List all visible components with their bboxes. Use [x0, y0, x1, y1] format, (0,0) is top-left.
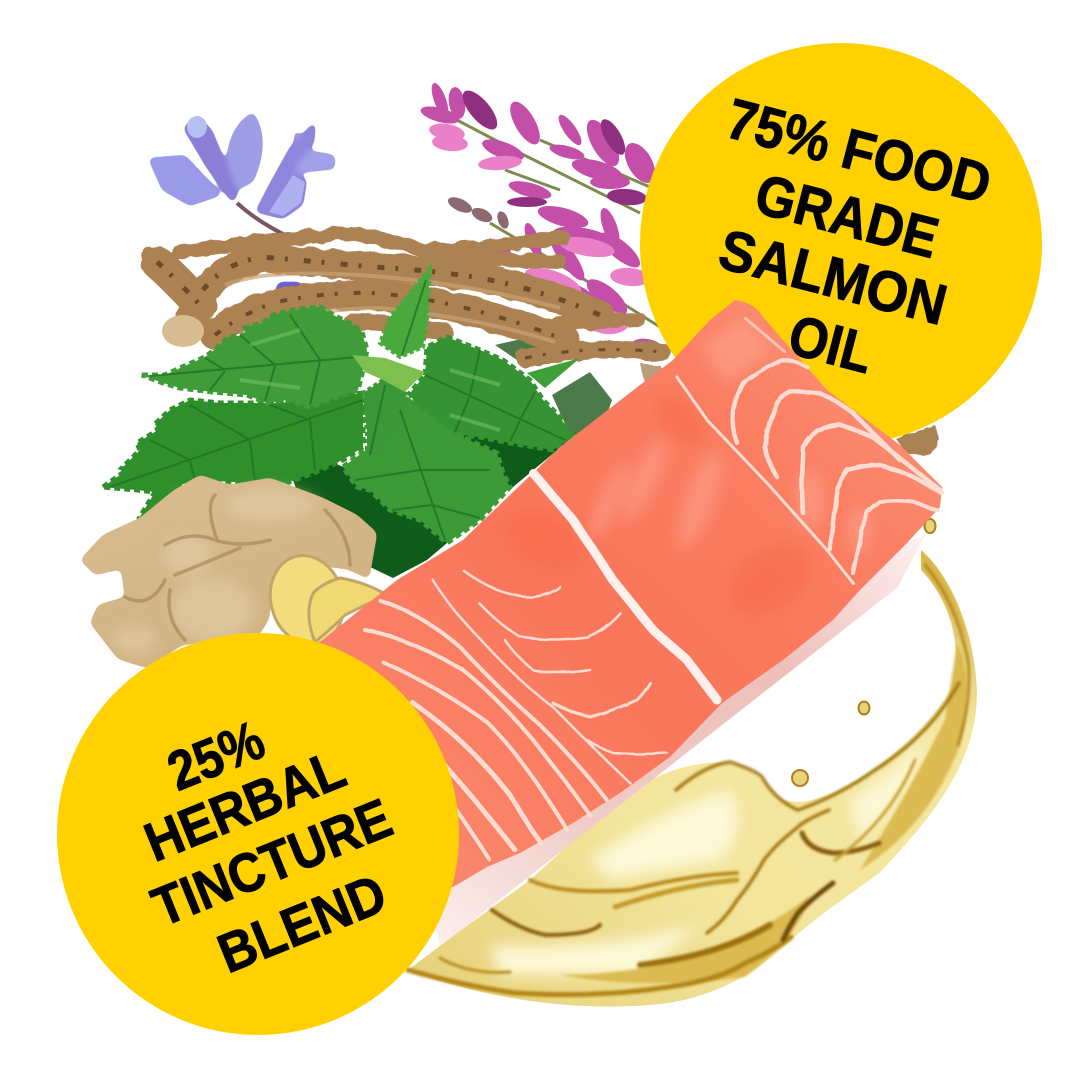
top small leaf [380, 268, 430, 357]
icon: blue sage flower [148, 112, 335, 303]
icon: dark leaves behind roots [495, 337, 612, 435]
callout: 75% food grade salmon oil circle [640, 43, 1042, 445]
icon: salmon fillet [320, 300, 942, 900]
oil strands [408, 565, 969, 995]
salmon light patches [584, 320, 872, 555]
soft shadow band under salmon [430, 535, 925, 945]
icon: golden oil swirl [408, 519, 977, 1007]
right leaf [410, 337, 573, 450]
ginger slices [261, 547, 387, 653]
callout text: TINCTURE [143, 786, 400, 938]
callout: 25% herbal tincture blend circle [57, 633, 459, 1035]
oil highlights [490, 730, 930, 975]
callout text: 25% [159, 708, 273, 802]
icon: ginger root [80, 475, 387, 668]
small spiky leaf [527, 358, 580, 388]
callout text [136, 708, 400, 985]
dark back leaves [293, 430, 573, 578]
icon: green nettle leaves [103, 268, 580, 578]
center small leaf [363, 380, 407, 463]
icon: pink flower spikes [419, 81, 664, 358]
oil droplets [792, 519, 936, 786]
top left leaf [142, 307, 367, 407]
callout text: HERBAL [136, 737, 354, 873]
callout text: BLEND [209, 862, 395, 985]
leaf veins [110, 280, 565, 540]
callout text: OIL [782, 303, 879, 386]
leaf highlights [240, 330, 500, 430]
callout text: SALMON [712, 217, 953, 338]
bottom center leaf [343, 400, 510, 543]
icon: dried roots [157, 233, 940, 457]
callout text: 75% FOOD [720, 87, 997, 217]
salmon fat stripes [365, 318, 942, 860]
callout text [712, 87, 997, 386]
oil darker glaze [560, 552, 970, 983]
callout text: GRADE [749, 162, 945, 271]
left lower leaf [103, 393, 363, 520]
